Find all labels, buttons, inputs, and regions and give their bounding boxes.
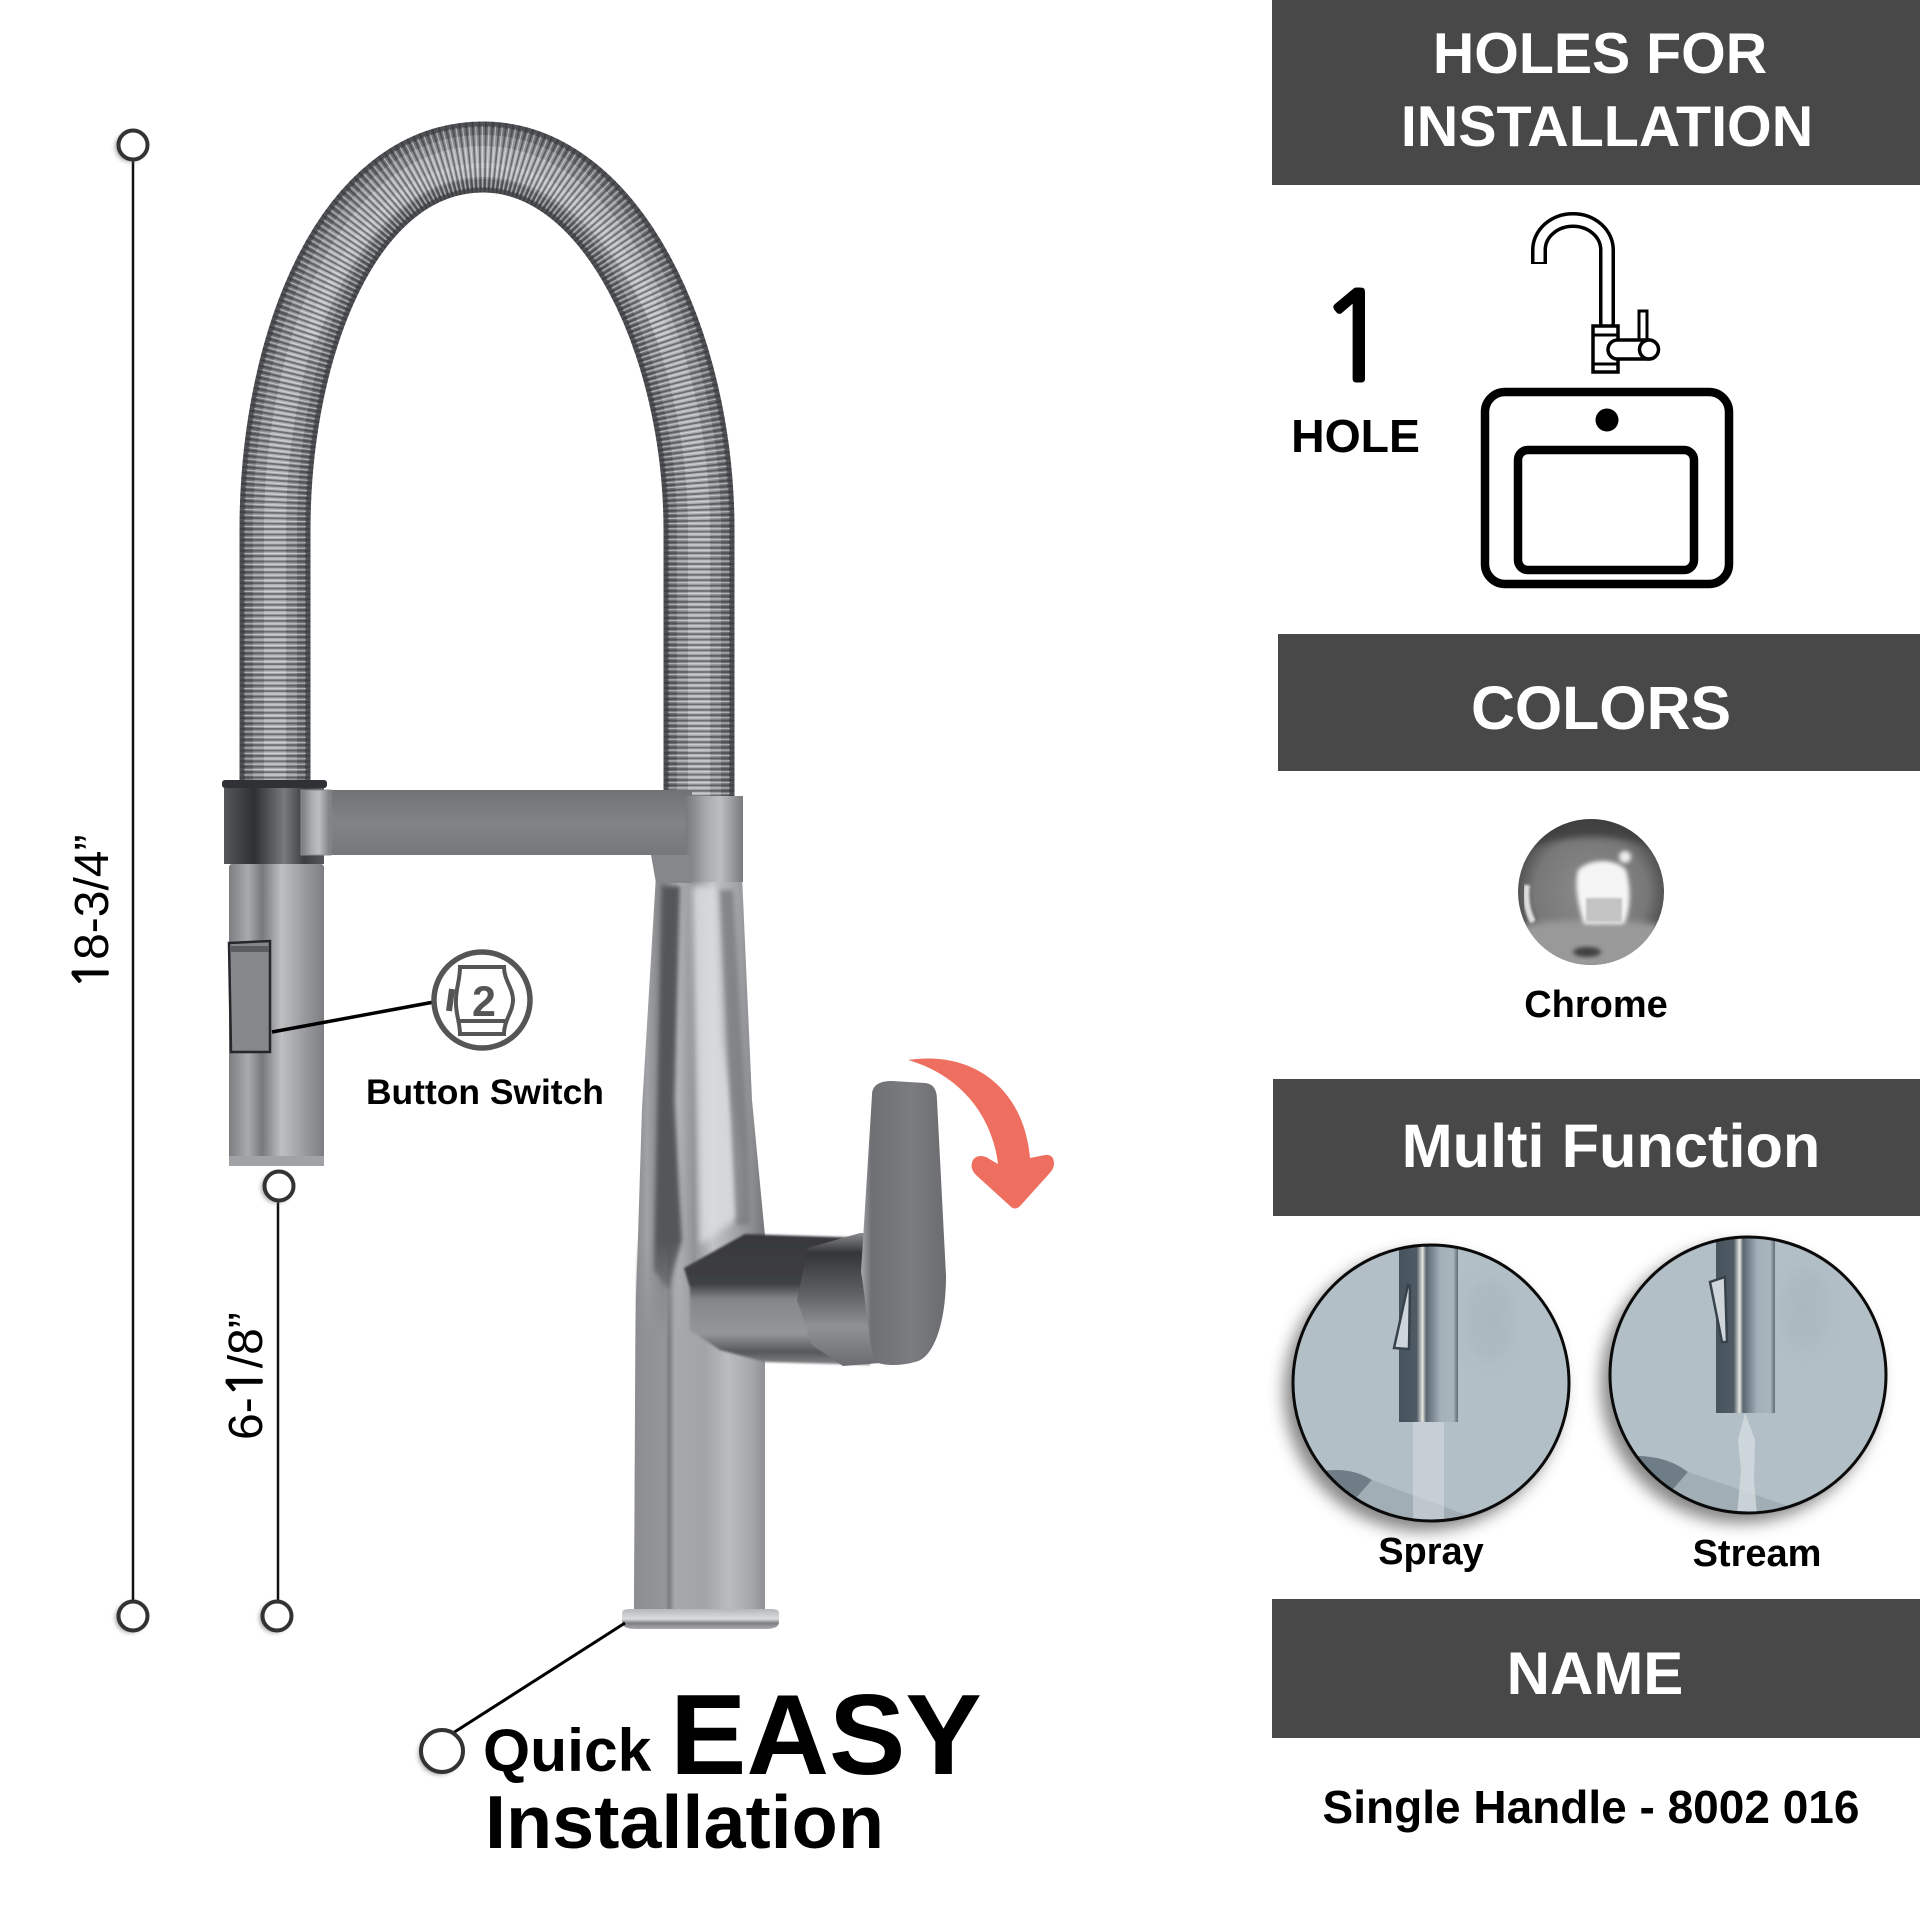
dark collar xyxy=(222,780,327,864)
callout: button switch xyxy=(272,952,604,1112)
header bar: COLORS xyxy=(1471,674,1731,742)
label: Chrome: Chrome xyxy=(1524,984,1668,1026)
header bar: INSTALLATION xyxy=(1401,95,1813,159)
stream mode image xyxy=(1601,1230,1886,1523)
header bar xyxy=(1278,634,1920,771)
dimension: overall height xyxy=(66,130,148,1633)
button switch on head xyxy=(229,941,270,1052)
header bar xyxy=(1273,1079,1920,1216)
header bar xyxy=(1272,0,1920,185)
label: Button Switch: Button Switch xyxy=(366,1072,604,1112)
product name: Single Handle - 8002 016 xyxy=(1323,1781,1859,1833)
panel: multi function xyxy=(1273,1079,1920,1575)
text: Quick: Quick xyxy=(483,1716,652,1784)
number of holes xyxy=(1291,276,1420,462)
header bar: HOLES FOR xyxy=(1433,22,1767,86)
panel: holes for installation xyxy=(1272,0,1920,584)
header bar xyxy=(1272,1599,1920,1738)
arrow: handle direction xyxy=(908,1058,1054,1208)
number of holes: 1 xyxy=(1318,276,1392,398)
label: Stream: Stream xyxy=(1693,1533,1821,1575)
horizontal crossbar xyxy=(301,790,743,883)
spray head xyxy=(229,864,324,1166)
text: Installation: Installation xyxy=(485,1781,884,1865)
number of holes: HOLE xyxy=(1291,410,1420,462)
chrome swatch xyxy=(1518,819,1664,965)
dimension: pull-down length xyxy=(220,1172,294,1633)
panel: name xyxy=(1272,1599,1920,1833)
lever handle xyxy=(861,1081,946,1365)
label: 18-3/4: 18-3/4” xyxy=(66,835,119,989)
icon: small faucet xyxy=(1539,220,1658,372)
base flange xyxy=(622,1609,779,1629)
label: Spray: Spray xyxy=(1378,1531,1484,1573)
header bar: NAME xyxy=(1507,1640,1683,1707)
label: 6-1/8: 6-1/8” xyxy=(220,1312,273,1440)
faucet body xyxy=(634,875,765,1610)
header bar: Multi Function xyxy=(1402,1112,1820,1180)
handle hub xyxy=(797,1233,880,1366)
text: EASY: EASY xyxy=(670,1671,982,1799)
panel: colors xyxy=(1278,634,1920,1026)
icon: button switch badge xyxy=(434,952,530,1048)
spray mode image xyxy=(1284,1240,1569,1531)
handle connector xyxy=(684,1234,870,1365)
flexible coil spout xyxy=(275,157,699,800)
icon: button switch badge: 2 xyxy=(472,978,496,1026)
callout: quick easy installation xyxy=(418,1623,982,1865)
faucet illustration xyxy=(222,157,946,1629)
icon: sink with one hole xyxy=(1485,392,1729,584)
